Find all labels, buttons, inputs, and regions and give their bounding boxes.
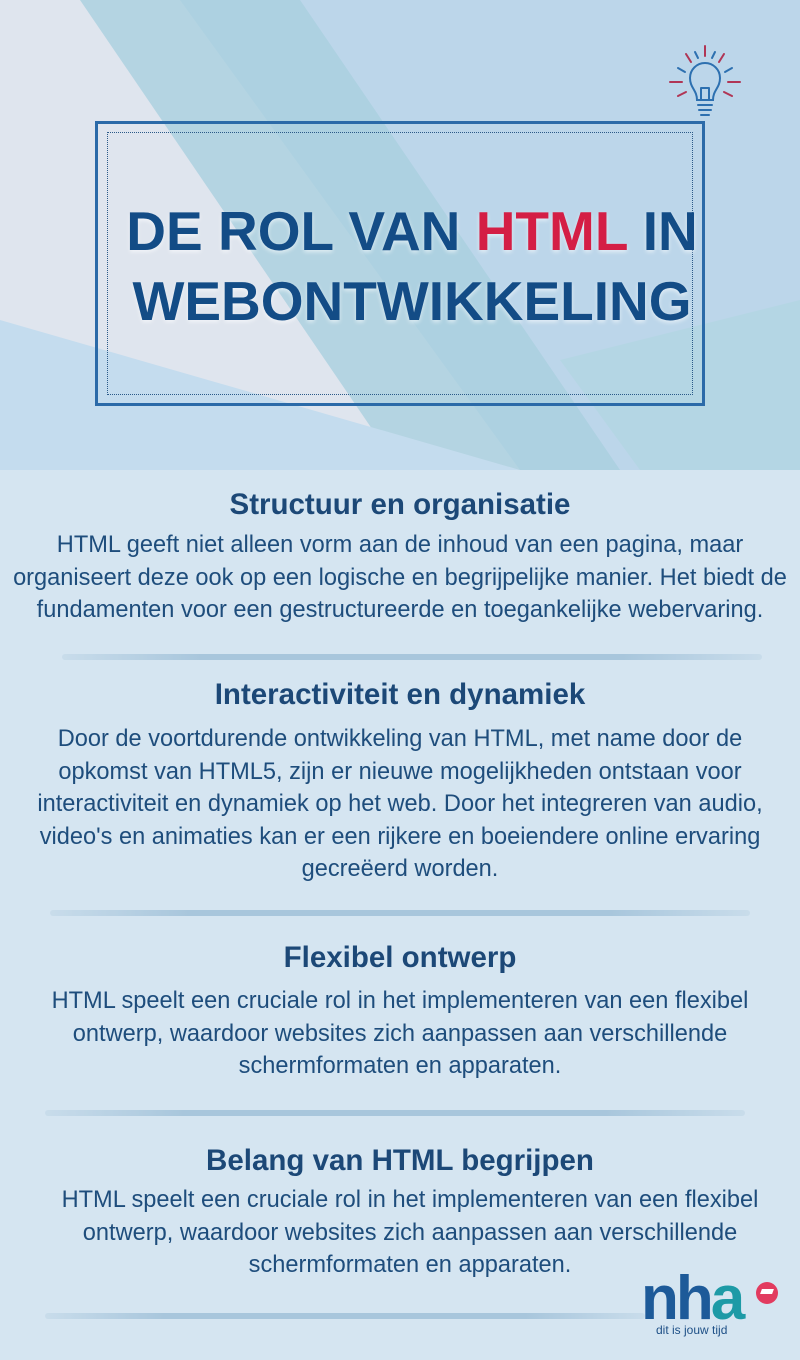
icon: light bulb [669,45,741,116]
icon: graduation cap [756,1282,778,1304]
title: WEBONTWIKKELING [132,270,692,332]
text: HTML speelt een cruciale rol in het implementeren van een flexibel [62,1187,758,1213]
text: HTML geeft niet alleen vorm aan de inhoud van een pagina, maar [57,532,743,558]
section: Flexibel ontwerp [52,941,748,1079]
text: interactiviteit en dynamiek op het web. Door het integreren van audio, [37,791,763,817]
logo: nha: dit is jouw tijd [656,1323,727,1337]
text: ontwerp, waardoor websites zich aanpassen aan verschillende [83,1220,737,1246]
heading: Structuur en organisatie [230,488,570,521]
text: ontwerp, waardoor websites zich aanpassen aan verschillende [73,1020,727,1046]
heading: Belang van HTML begrijpen [206,1144,594,1177]
text: schermformaten en apparaten. [239,1053,561,1079]
text: fundamenten voor een gestructureerde en toegankelijke webervaring. [37,597,763,623]
text [52,988,748,1079]
text: video's en animaties kan er een rijkere en boeiendere online ervaring [40,824,760,850]
text [13,532,787,623]
title [126,200,698,332]
header background [0,0,800,470]
text: gecreëerd worden. [302,856,498,882]
heading: Interactiviteit en dynamiek [215,678,585,711]
section: Interactiviteit en dynamiek [37,678,763,882]
text [37,726,763,882]
section: Structuur en organisatie [13,488,787,623]
text: Door de voortdurende ontwikkeling van HTML, met name door de [58,726,742,752]
text: HTML speelt een cruciale rol in het implementeren van een flexibel [52,988,748,1014]
heading: Flexibel ontwerp [284,941,516,974]
text: opkomst van HTML5, zijn er nieuwe mogelijkheden ontstaan voor [58,758,742,784]
text: organiseert deze ook op een logische en begrijpelijke manier. Het biedt de [13,564,787,590]
logo: nha [641,1264,778,1337]
title: DE ROL VAN HTML IN [126,200,698,262]
text: schermformaten en apparaten. [249,1252,571,1278]
section: Belang van HTML begrijpen [62,1144,758,1278]
logo: nha: nha [641,1264,742,1333]
text [62,1187,758,1278]
title box [95,121,705,406]
